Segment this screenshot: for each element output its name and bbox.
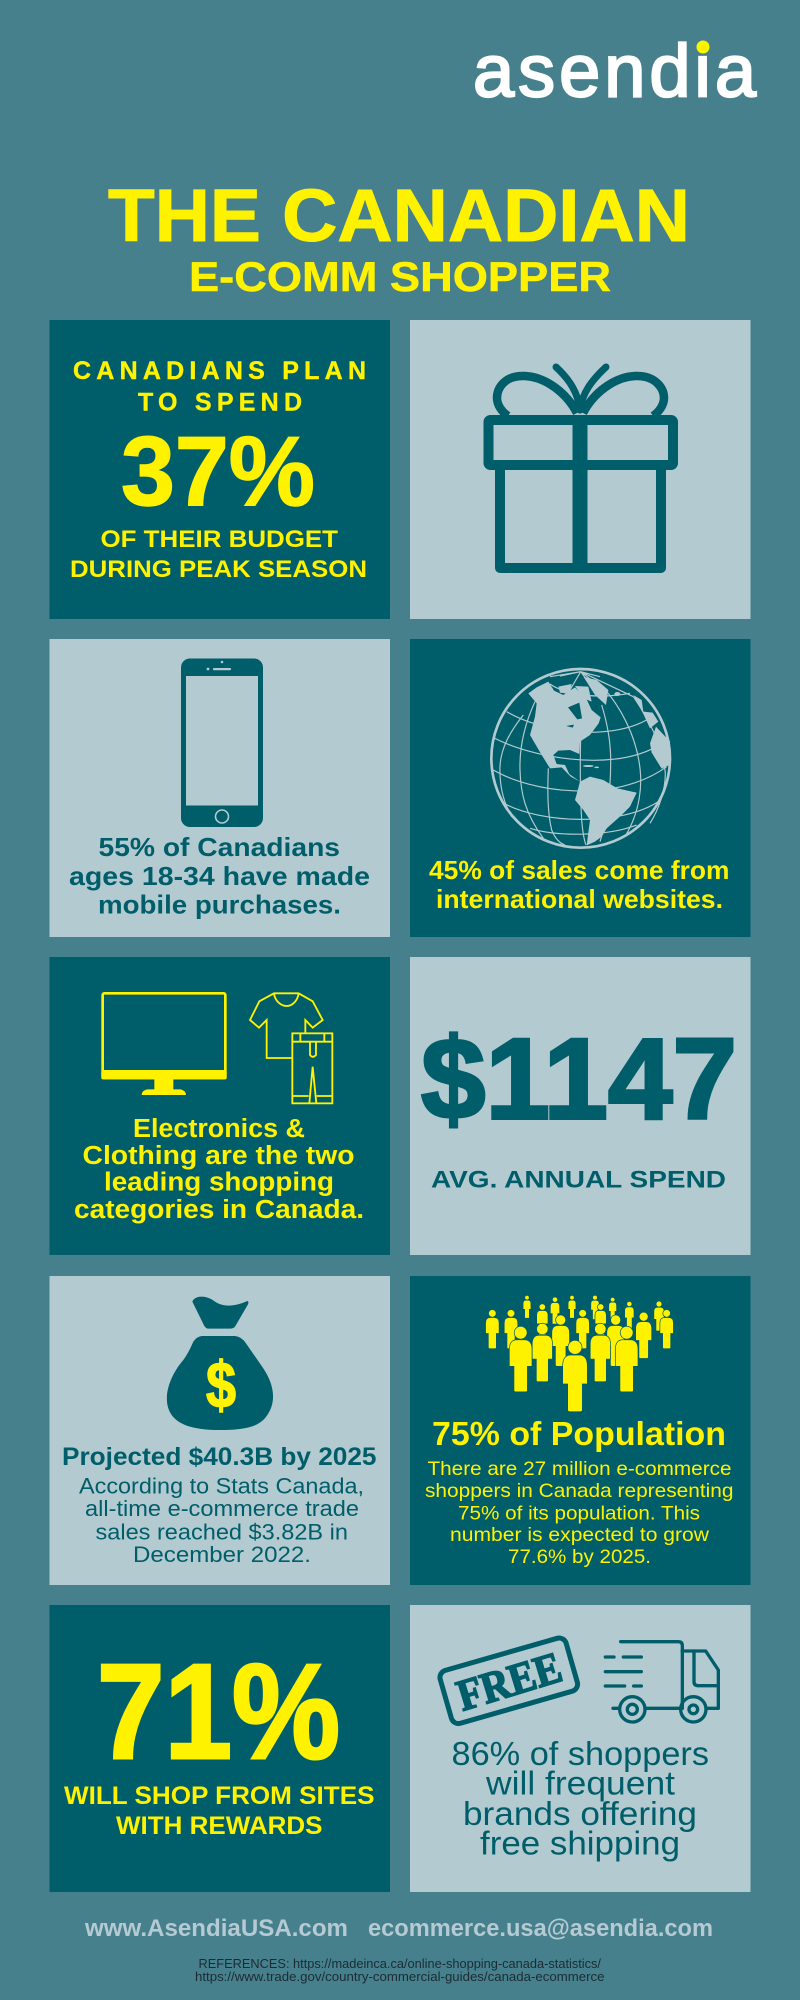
panel: 75% of population: 75% of its population. This (458, 1502, 700, 1524)
panel: projected sales: According to Stats Canada, (79, 1474, 364, 1498)
icon: delivery truck (605, 1642, 718, 1722)
panel: 75% of population: number is expected to grow (450, 1524, 710, 1546)
panel: 71% rewards: 71% (97, 1636, 340, 1787)
icon: dollar sign: $ (206, 1348, 236, 1421)
panel: 37% budget (50, 320, 390, 619)
panel: 37% budget: DURING PEAK SEASON (70, 556, 367, 583)
panel: free shipping: brands offering (463, 1795, 697, 1832)
icon: money bag (167, 1297, 273, 1430)
icon: shirt and pants (250, 993, 332, 1103)
panel: shopping categories: categories in Canada. (74, 1196, 364, 1224)
panel: 71% rewards: WILL SHOP FROM SITES (64, 1782, 374, 1810)
icon: smartphone (181, 658, 263, 827)
title (108, 174, 690, 300)
panel: average annual spend (410, 957, 750, 1255)
panel: international websites (410, 639, 750, 937)
panel: shopping categories: Electronics & (133, 1115, 305, 1143)
panel: projected sales: all-time e-commerce trade (85, 1496, 359, 1521)
panel: free shipping: free shipping (480, 1824, 680, 1862)
panel: projected sales: Projected $40.3B by 2025 (62, 1443, 377, 1471)
panel: shopping categories (50, 957, 390, 1255)
footer: references: https://www.trade.gov/country-commercial-guides/canada-ecommerce (195, 1970, 605, 1984)
panel: shopping categories: leading shopping (104, 1168, 334, 1196)
panel: 75% of population: 75% of Population (432, 1415, 726, 1452)
footer: references: REFERENCES: https://madeinca.ca/online-shopping-canada-statistics/ (198, 1957, 602, 1971)
panel: mobile purchases: ages 18-34 have made (69, 861, 370, 891)
panel: international websites: international websites. (436, 884, 723, 914)
panel: shopping categories: Clothing are the two (82, 1142, 354, 1170)
panel: mobile purchases: mobile purchases. (98, 890, 341, 920)
icon: monitor (101, 993, 227, 1095)
icon: gift box (488, 367, 673, 573)
footer: contact links: www.AsendiaUSA.com (84, 1915, 348, 1942)
panel: projected sales: December 2022. (133, 1542, 311, 1567)
panel: 37% budget: TO SPEND (138, 388, 302, 416)
panel: 75% of population: There are 27 million e-commerce (428, 1458, 732, 1480)
footer: references (195, 1957, 605, 1984)
panel: international websites: 45% of sales come from (429, 855, 730, 885)
panel: 71% rewards (50, 1605, 390, 1892)
icon: crowd of people (486, 1295, 673, 1412)
panel: mobile purchases: 55% of Canadians (98, 832, 340, 862)
panel: projected sales: sales reached $3.82B in (96, 1520, 348, 1544)
panel: 37% budget: CANADIANS PLAN (73, 357, 366, 385)
icon: free stamp: FREE (451, 1643, 568, 1721)
logo: asendia: asendia (473, 30, 757, 112)
title: THE CANADIAN (108, 174, 690, 257)
panel: 75% of population: shoppers in Canada representing (425, 1480, 734, 1502)
panel: 75% of population: 77.6% by 2025. (508, 1546, 651, 1568)
panel: free shipping: 86% of shoppers (452, 1735, 709, 1772)
footer: contact links (84, 1915, 713, 1942)
panel: 37% budget: OF THEIR BUDGET (100, 526, 338, 553)
title: E-COMM SHOPPER (189, 253, 611, 300)
panel: 75% of population (410, 1276, 750, 1585)
panel: 37% budget: 37% (121, 416, 315, 526)
icon: globe (491, 669, 670, 848)
panel: projected sales (50, 1276, 390, 1585)
panel: average annual spend: AVG. ANNUAL SPEND (431, 1166, 726, 1194)
panel: free shipping (410, 1605, 750, 1892)
panel: free shipping: will frequent (485, 1764, 675, 1802)
panel: average annual spend: $1147 (421, 1016, 737, 1144)
panel: gift (410, 320, 750, 619)
panel: 71% rewards: WITH REWARDS (116, 1812, 322, 1840)
footer: contact links: ecommerce.usa@asendia.com (368, 1915, 713, 1942)
panel: mobile purchases (50, 639, 390, 937)
